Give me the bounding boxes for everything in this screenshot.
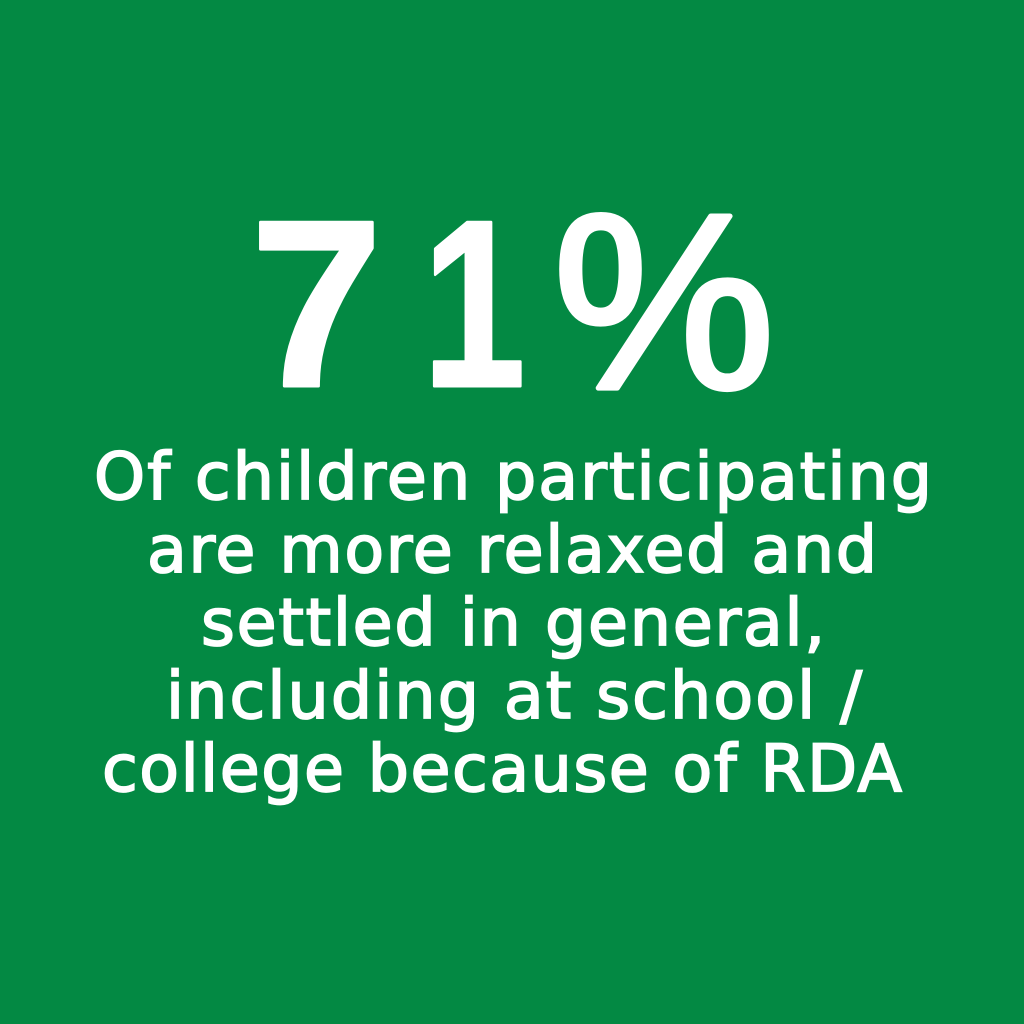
- description text: college because of RDA: [102, 732, 902, 807]
- big statistic: 1: [422, 172, 526, 437]
- description text: [94, 440, 932, 807]
- description text: Of children participating: [94, 440, 932, 515]
- description text: are more relaxed and: [147, 513, 877, 588]
- big statistic: 7: [250, 172, 383, 437]
- big statistic: [250, 162, 775, 441]
- description text: settled in general,: [201, 586, 825, 661]
- big statistic: %: [553, 162, 775, 441]
- description text: including at school /: [166, 659, 862, 734]
